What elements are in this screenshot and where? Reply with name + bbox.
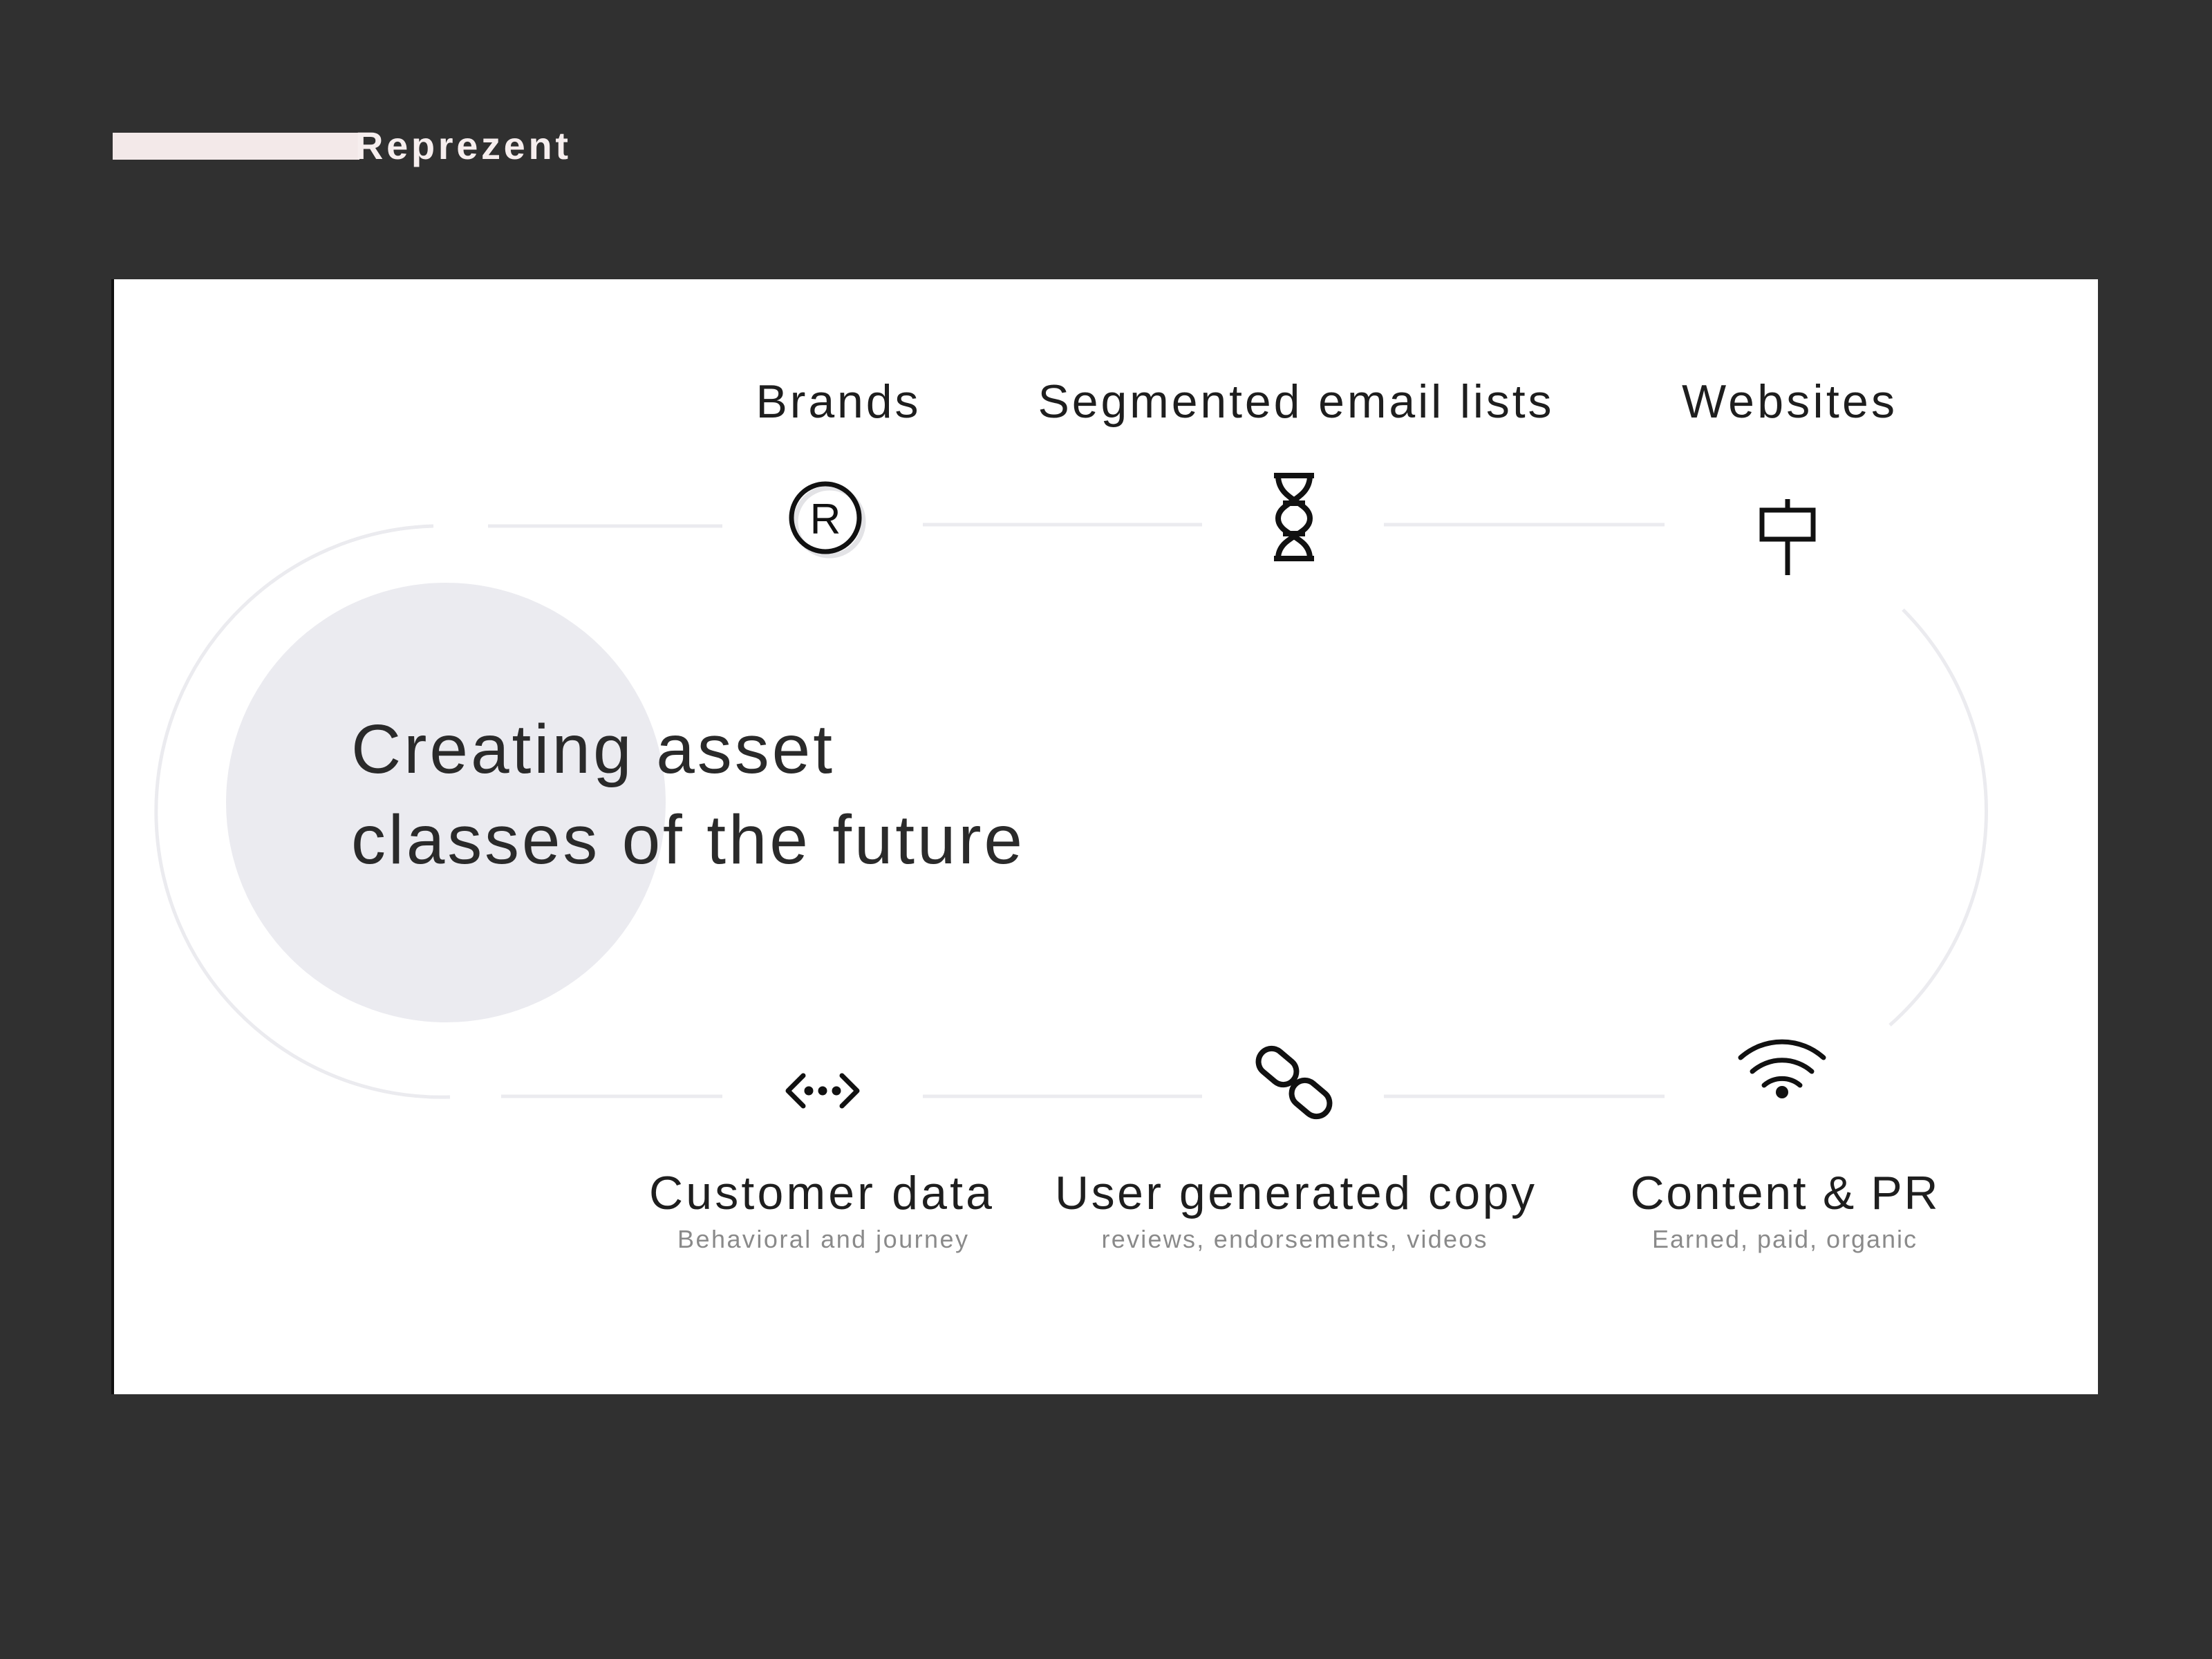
icon: registered [791, 484, 863, 556]
logo [113, 124, 568, 167]
label: Customer data [649, 1167, 992, 1253]
label: Content & PR: Content & PR [1630, 1167, 1938, 1219]
icon: link [1253, 1043, 1335, 1122]
logo: Reprezent [355, 124, 568, 167]
label: Customer data: Customer data [649, 1167, 992, 1219]
title: classes of the future [351, 801, 1022, 879]
label: Segmented email lists: Segmented email lists [1038, 375, 1551, 428]
label: Brands: Brands [756, 375, 918, 428]
label: Content & PR [1630, 1167, 1938, 1253]
panel: main card [111, 279, 2098, 1394]
icon: DNA [1274, 476, 1314, 559]
label: Content & PR: Earned, paid, organic [1652, 1225, 1916, 1253]
title [351, 711, 1022, 879]
title: Creating asset [351, 711, 832, 788]
label: Customer data: Behavioral and journey [677, 1225, 968, 1253]
label: User generated copy: reviews, endorsements, videos [1102, 1225, 1486, 1253]
icon: wifi [1741, 1042, 1824, 1098]
icon: signpost [1762, 499, 1813, 575]
icon: code arrows [788, 1076, 857, 1106]
background circle [226, 583, 666, 1022]
label: User generated copy [1055, 1167, 1535, 1253]
connector lines [156, 525, 1986, 1097]
icon: registered: R [810, 496, 841, 543]
label: Websites: Websites [1682, 375, 1895, 428]
label: User generated copy: User generated copy [1055, 1167, 1535, 1219]
